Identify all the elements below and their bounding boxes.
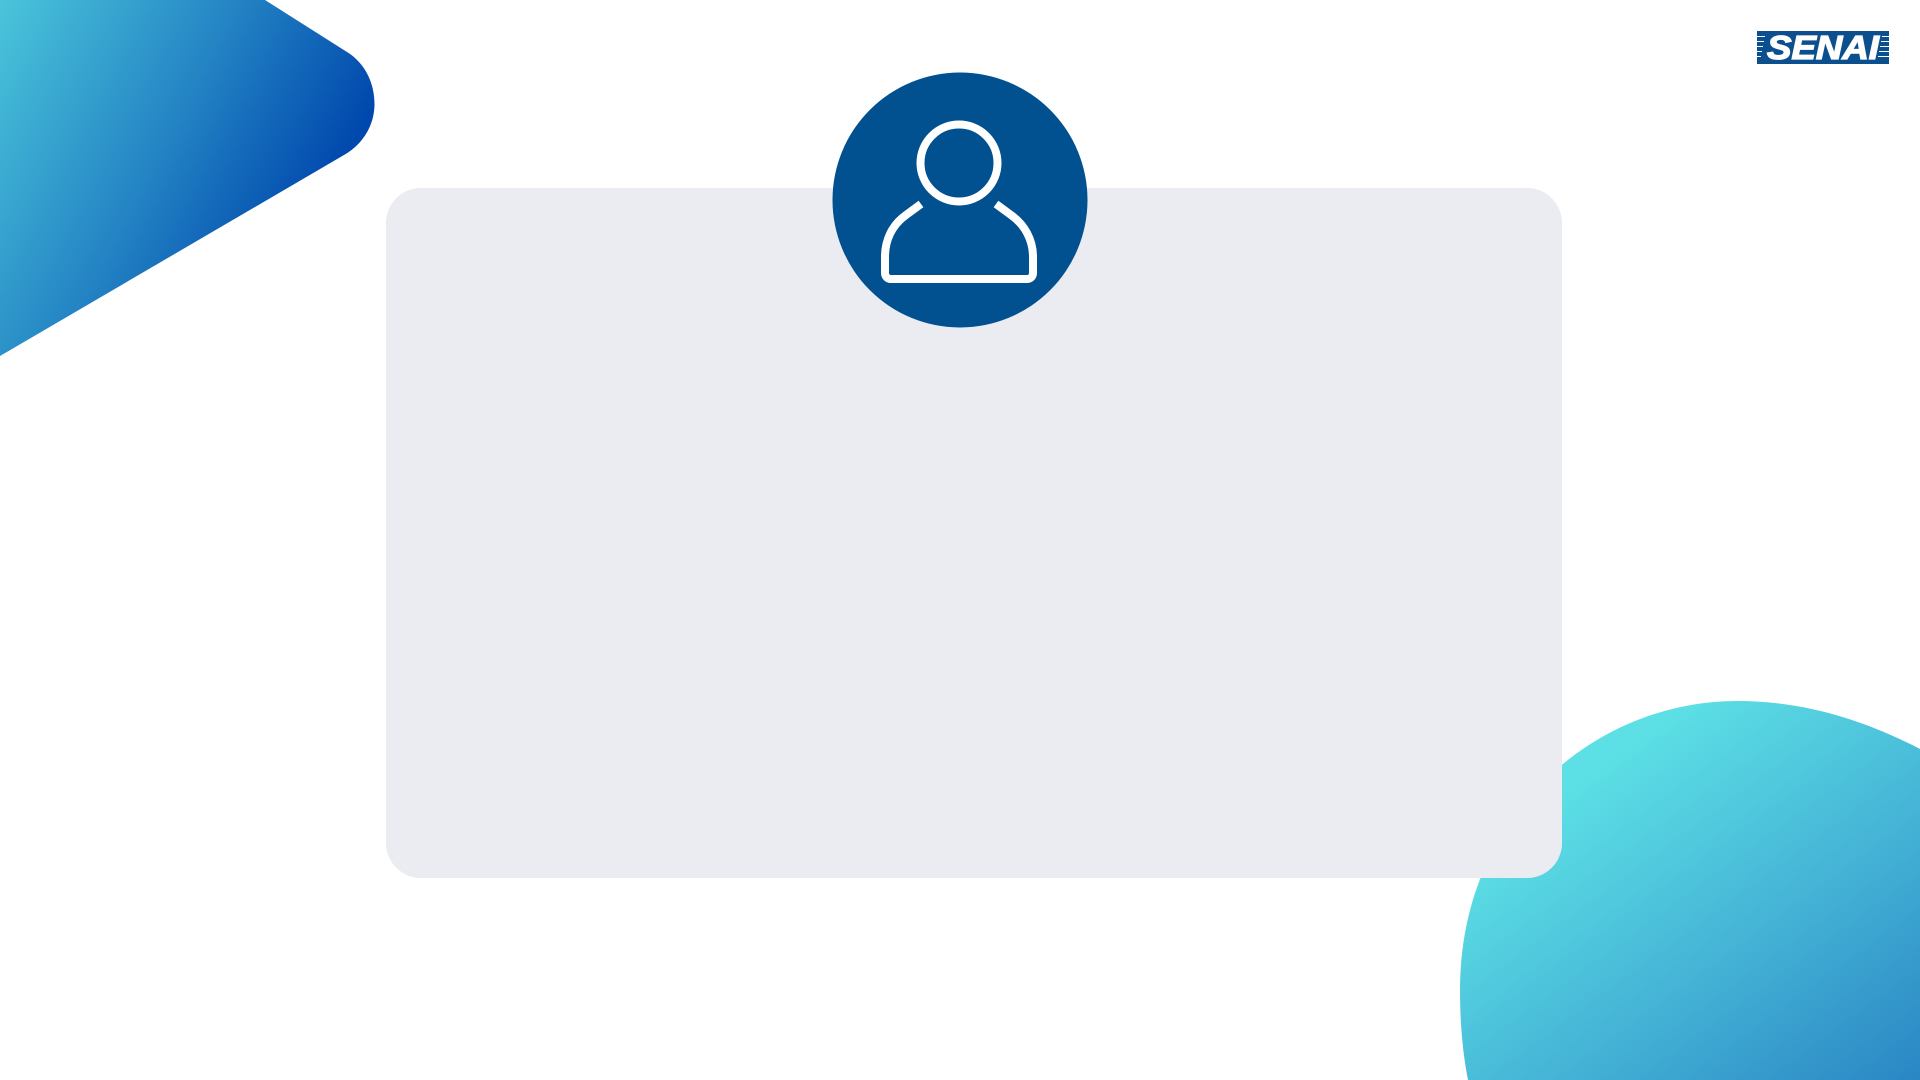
decorative shape: top-left gradient arrow — [0, 0, 374, 356]
logo: SENAI: SENAI — [1767, 29, 1880, 66]
panel: main content card — [386, 188, 1562, 878]
icon: user avatar badge — [832, 72, 1088, 328]
decorative shape: bottom-right gradient blob — [1460, 701, 1920, 1080]
